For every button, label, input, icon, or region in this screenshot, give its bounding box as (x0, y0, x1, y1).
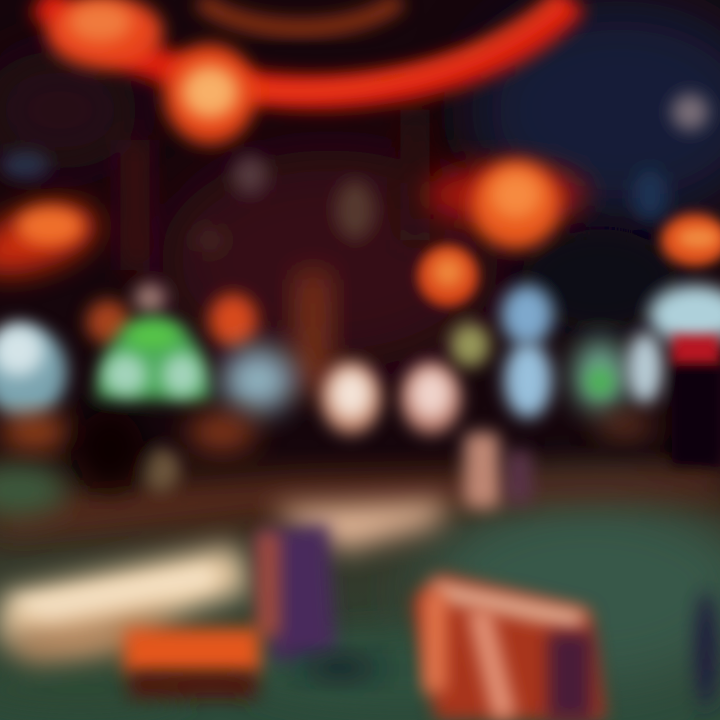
lamp: tall blue (501, 285, 553, 418)
neon ring: top red arc (40, 0, 572, 92)
lantern: left (0, 191, 106, 289)
lantern: centre right (425, 161, 585, 249)
lower glow row (0, 410, 653, 492)
chip stack: purple (256, 524, 380, 680)
lamp: white right (401, 362, 461, 434)
distant lights (0, 94, 708, 254)
lamp: white far right (627, 332, 663, 404)
lantern: top left (47, 0, 163, 68)
table: cream light strips (0, 500, 450, 662)
lantern: far right (661, 214, 720, 266)
background: dark room glow (0, 0, 720, 370)
central pillar (295, 270, 331, 390)
lantern: top centre (164, 44, 256, 144)
chip stack: pink upper (464, 432, 532, 508)
table: green felt (0, 464, 720, 714)
lamp: green (97, 318, 210, 400)
lamp: pale blue (222, 348, 294, 412)
chip stack: red and cream (412, 574, 718, 720)
lamps: small orange (86, 283, 257, 346)
lamp: green right (574, 339, 626, 411)
machine: right with red band (649, 285, 720, 466)
lamp: white left (321, 362, 381, 434)
chip stack: orange (124, 628, 260, 698)
lamp: left blue-white (0, 324, 67, 418)
lamp: yellow-green (450, 323, 490, 367)
lantern: small centre (418, 246, 478, 306)
